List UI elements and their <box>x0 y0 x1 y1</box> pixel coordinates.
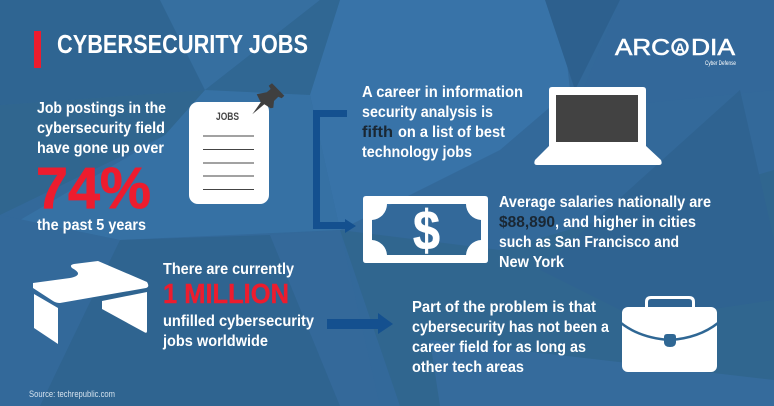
bracket arrow <box>313 110 356 233</box>
logo: Arcadia: A <box>675 40 685 56</box>
icon: briefcase <box>621 298 718 372</box>
logo: Arcadia: DIA <box>691 34 736 60</box>
text block: salaries: such as San Francisco and <box>499 234 679 251</box>
text block: 1 million jobs: jobs worldwide <box>162 333 268 350</box>
text block: salaries <box>499 194 711 271</box>
stat: 74%: 74% <box>36 156 151 221</box>
icon: dollar bill <box>363 196 488 263</box>
text block: career: on a list of best <box>398 124 506 141</box>
icon: laptop <box>534 87 662 165</box>
logo: Arcadia: ARC <box>615 34 670 60</box>
text block: salaries: New York <box>499 254 564 271</box>
text block: part of the problem: Part of the problem is that <box>412 299 597 316</box>
icon: jobs document with pin <box>189 83 284 204</box>
text block: job postings <box>36 100 166 234</box>
icon: desk <box>33 261 148 344</box>
text block: career <box>362 84 523 161</box>
text block: career: A career in information <box>362 84 523 101</box>
text block: job postings: the past 5 years <box>37 217 146 234</box>
text block: part of the problem: career field for as long as <box>412 339 586 356</box>
text block: part of the problem: cybersecurity has not been a <box>412 319 609 336</box>
logo: Arcadia: Cyber Defense <box>705 61 737 67</box>
text block: salaries: $88,890 <box>499 214 555 231</box>
source note: Source: techrepublic.com <box>29 389 115 399</box>
text block: job postings: have gone up over <box>37 140 164 157</box>
text block: salaries: Average salaries nationally are <box>499 194 711 211</box>
logo: Arcadia <box>615 34 737 67</box>
title: CYBERSECURITY JOBS <box>57 29 308 59</box>
text block: career: security analysis is <box>362 104 493 121</box>
arrow <box>327 313 393 334</box>
text block: 1 million jobs: unfilled cybersecurity <box>163 313 314 330</box>
icon: dollar bill: $ <box>413 198 440 262</box>
text block: part of the problem: other tech areas <box>412 359 524 376</box>
text block: job postings: cybersecurity field <box>37 120 165 137</box>
text block: career: fifth <box>362 124 393 141</box>
text block: 1 million jobs: There are currently <box>163 261 294 278</box>
text block: job postings: Job postings in the <box>37 100 166 117</box>
text block: salaries: , and higher in cities <box>555 214 696 231</box>
text block: 1 million jobs <box>162 261 314 350</box>
title accent bar <box>34 31 41 68</box>
text block: career: technology jobs <box>362 144 472 161</box>
icon: jobs document with pin: JOBS <box>216 111 239 123</box>
stat: 1 million: 1 MILLION <box>163 278 289 309</box>
text block: part of the problem <box>412 299 609 376</box>
